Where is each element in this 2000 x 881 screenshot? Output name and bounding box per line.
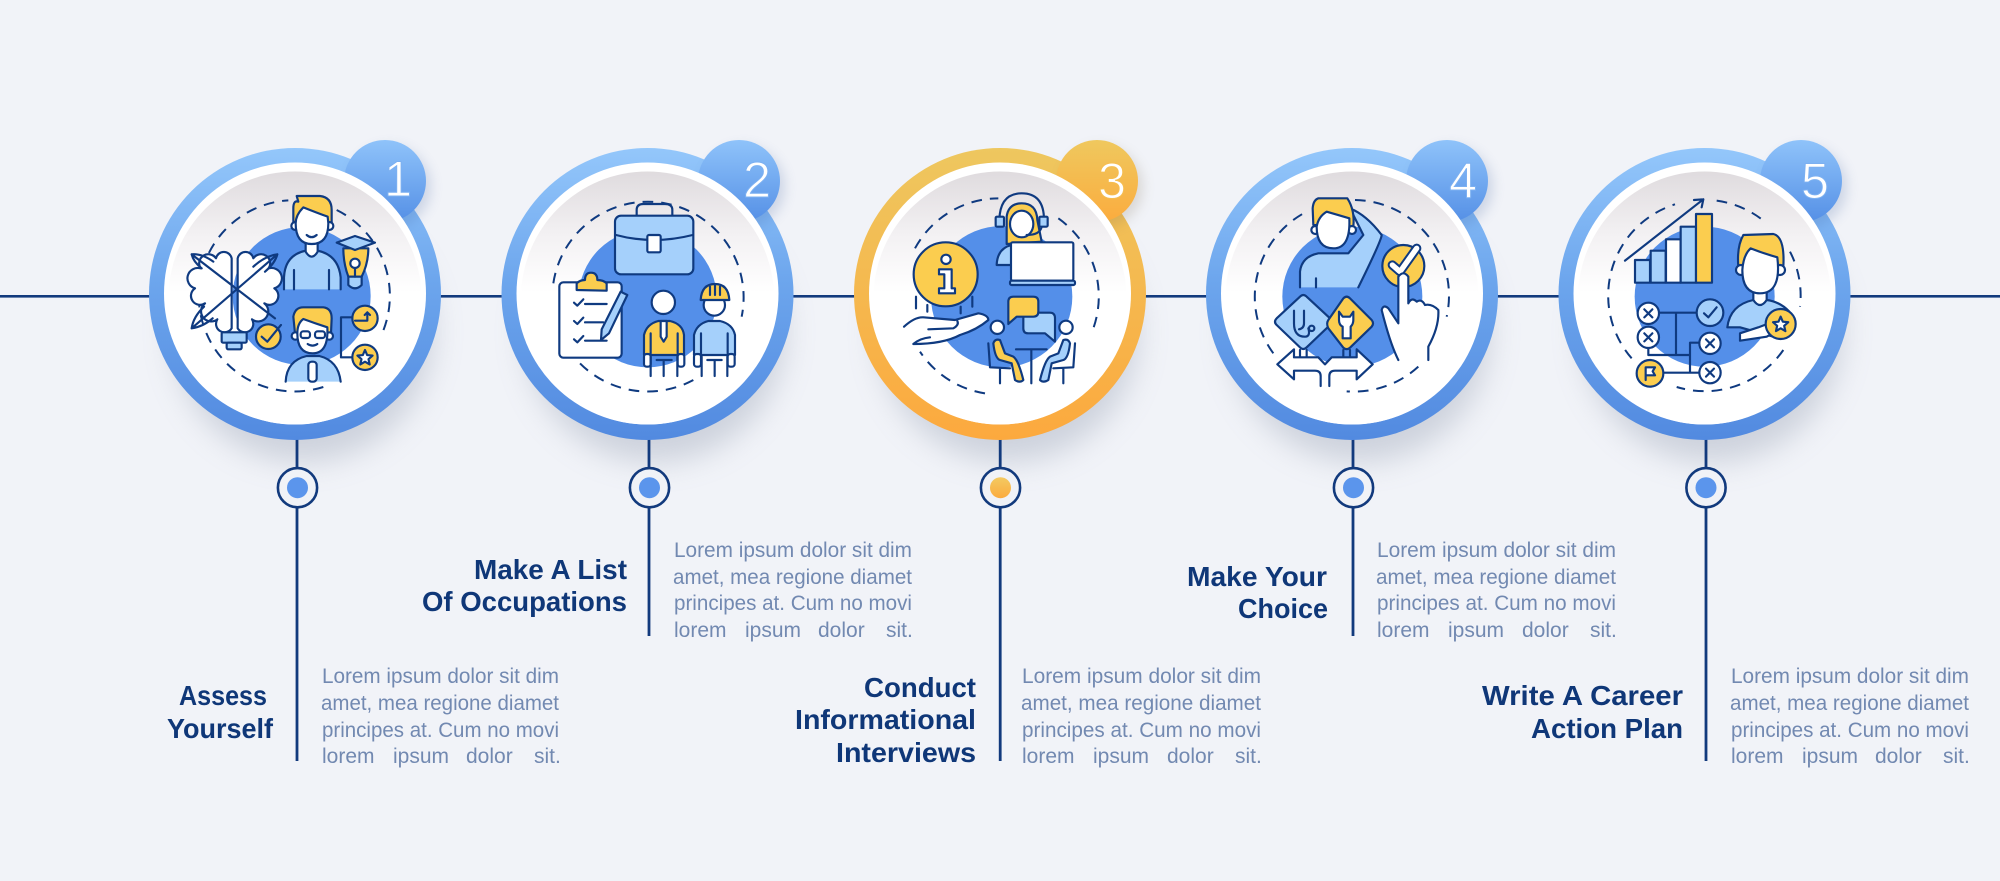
step 3 description: lorem <box>1022 745 1075 768</box>
icon part: upper person <box>284 196 341 289</box>
step 3 description: Lorem ipsum dolor sit dim <box>1022 665 1261 688</box>
icon part: briefcase <box>615 204 693 274</box>
step 2 title <box>422 554 627 617</box>
step 4 description: ipsum <box>1448 619 1504 642</box>
step 5 description: Lorem ipsum dolor sit dim <box>1731 665 1969 688</box>
icon part: lower person <box>286 307 341 382</box>
icon part: medical sign <box>1275 295 1332 357</box>
icon: career choice <box>1255 198 1449 392</box>
step 2 description: sit. <box>886 619 913 642</box>
step 5 number: 5 <box>1801 153 1829 209</box>
step 3 title <box>795 672 976 768</box>
step 2 description <box>673 539 913 642</box>
step 2 inner disc <box>516 162 778 424</box>
step 1 <box>149 140 561 768</box>
step 1 title: Yourself <box>167 713 274 744</box>
step 2 description: principes at. Cum no movi <box>674 592 912 615</box>
step 5 description: principes at. Cum no movi <box>1731 719 1969 742</box>
step 1 title: Assess <box>179 680 267 711</box>
step 3 title: Conduct <box>864 672 976 703</box>
step 3 number: 3 <box>1098 153 1126 209</box>
icon part: check badge <box>1382 245 1424 287</box>
step 1 description: dolor <box>466 745 513 768</box>
step 5 title: Action Plan <box>1531 713 1683 744</box>
step 4 title: Make Your <box>1187 561 1327 592</box>
icon part: split arrows <box>1277 349 1373 386</box>
step 2 number: 2 <box>743 152 771 208</box>
icon part: information coin <box>914 242 978 313</box>
step 2 title: Of Occupations <box>422 586 627 617</box>
step 5 description: amet, mea regione diamet <box>1730 692 1969 715</box>
step 1 description: principes at. Cum no movi <box>322 719 559 742</box>
step 3 description: principes at. Cum no movi <box>1022 719 1261 742</box>
step 3 description: ipsum <box>1093 745 1149 768</box>
step 5 description: ipsum <box>1802 745 1858 768</box>
step 5 inner disc <box>1574 162 1836 424</box>
icon part: graduation bulb <box>337 236 375 288</box>
step 4 description: Lorem ipsum dolor sit dim <box>1377 539 1616 562</box>
step 5 description <box>1730 665 1970 768</box>
icon part: brain <box>187 252 282 349</box>
icon part: speech bubbles <box>1008 297 1055 342</box>
icon part: laptop <box>1010 242 1075 285</box>
step 4 number: 4 <box>1449 153 1477 209</box>
step 4 inner disc <box>1221 162 1483 424</box>
step 1 title <box>167 680 274 744</box>
step 5 ring <box>1558 148 1850 440</box>
step 1 description: amet, mea regione diamet <box>321 692 559 715</box>
icon part: technical sign <box>1327 297 1373 357</box>
step 3 title: Informational <box>795 704 976 735</box>
icon: self assessment <box>187 196 390 391</box>
step 5 title <box>1482 680 1683 744</box>
step 4 title <box>1187 561 1328 624</box>
icon part: people at table <box>988 321 1075 383</box>
step 1 ring <box>149 148 441 440</box>
step 5 connector and node <box>1686 438 1726 761</box>
step 2 title: Make A List <box>474 554 627 585</box>
step 5 description: dolor <box>1875 745 1922 768</box>
step 1 description: sit. <box>534 745 561 768</box>
step 4 connector and node <box>1334 438 1373 636</box>
icon part: office worker <box>644 291 684 376</box>
icon part: decision tree <box>1637 299 1723 387</box>
step 4 description: sit. <box>1590 619 1617 642</box>
step 5 title: Write A Career <box>1482 680 1683 711</box>
icon part: clipboard <box>559 273 627 358</box>
step 5 description: lorem <box>1731 745 1784 768</box>
icon part: growth bar chart <box>1625 199 1712 283</box>
step 2 ring <box>502 148 794 440</box>
step 5 <box>1482 140 1970 768</box>
icon part: person with star <box>1727 234 1796 341</box>
step 3 inner disc <box>869 162 1131 424</box>
step 4 description <box>1376 539 1617 642</box>
icon part: thinking person <box>1300 198 1382 287</box>
step 1 badge <box>344 140 431 228</box>
step 1 description: ipsum <box>393 745 449 768</box>
step 4 <box>1187 140 1617 642</box>
step 3 description <box>1021 665 1262 768</box>
step 1 description: Lorem ipsum dolor sit dim <box>322 665 559 688</box>
step 3 description: sit. <box>1235 745 1262 768</box>
step 2 connector and node <box>630 438 669 636</box>
step 1 connector and node <box>278 438 317 761</box>
step 3 title: Interviews <box>836 737 976 768</box>
icon part: check badge <box>256 324 281 349</box>
step 2 <box>422 140 913 642</box>
step 2 description: dolor <box>818 619 865 642</box>
step 2 description: lorem <box>674 619 727 642</box>
step 3 badge <box>1056 140 1143 228</box>
icon part: support operator <box>996 193 1048 265</box>
step 2 badge <box>698 140 785 228</box>
icon: informational interviews <box>904 193 1099 393</box>
step 3 (highlighted) <box>795 140 1262 768</box>
step 2 description: Lorem ipsum dolor sit dim <box>674 539 912 562</box>
step 3 connector and node <box>981 438 1020 761</box>
icon part: open hand <box>904 313 988 344</box>
step 3 description: amet, mea regione diamet <box>1021 692 1261 715</box>
circle drop shadows <box>173 202 1842 462</box>
icon: occupations list <box>553 202 744 392</box>
step 4 ring <box>1206 148 1498 440</box>
step 1 description <box>321 665 561 768</box>
step 4 badge <box>1406 140 1493 228</box>
icon part: pointing hand <box>1382 273 1438 361</box>
icon: career action plan <box>1608 199 1801 391</box>
step 1 number: 1 <box>384 151 412 207</box>
step 4 description: dolor <box>1522 619 1569 642</box>
step 2 description: amet, mea regione diamet <box>673 566 912 589</box>
step 3 ring <box>854 148 1146 440</box>
step 2 description: ipsum <box>745 619 801 642</box>
icon part: construction worker <box>694 284 735 376</box>
step 4 description: principes at. Cum no movi <box>1377 592 1616 615</box>
step 4 description: amet, mea regione diamet <box>1376 566 1616 589</box>
step 4 title: Choice <box>1238 593 1328 624</box>
step 3 description: dolor <box>1167 745 1214 768</box>
step 4 description: lorem <box>1377 619 1430 642</box>
icon part: goal connectors <box>341 306 378 370</box>
step 5 description: sit. <box>1943 745 1970 768</box>
horizontal timeline <box>0 295 2000 298</box>
step 1 inner disc <box>164 162 426 424</box>
step 5 badge <box>1760 140 1847 228</box>
step 1 description: lorem <box>322 745 375 768</box>
